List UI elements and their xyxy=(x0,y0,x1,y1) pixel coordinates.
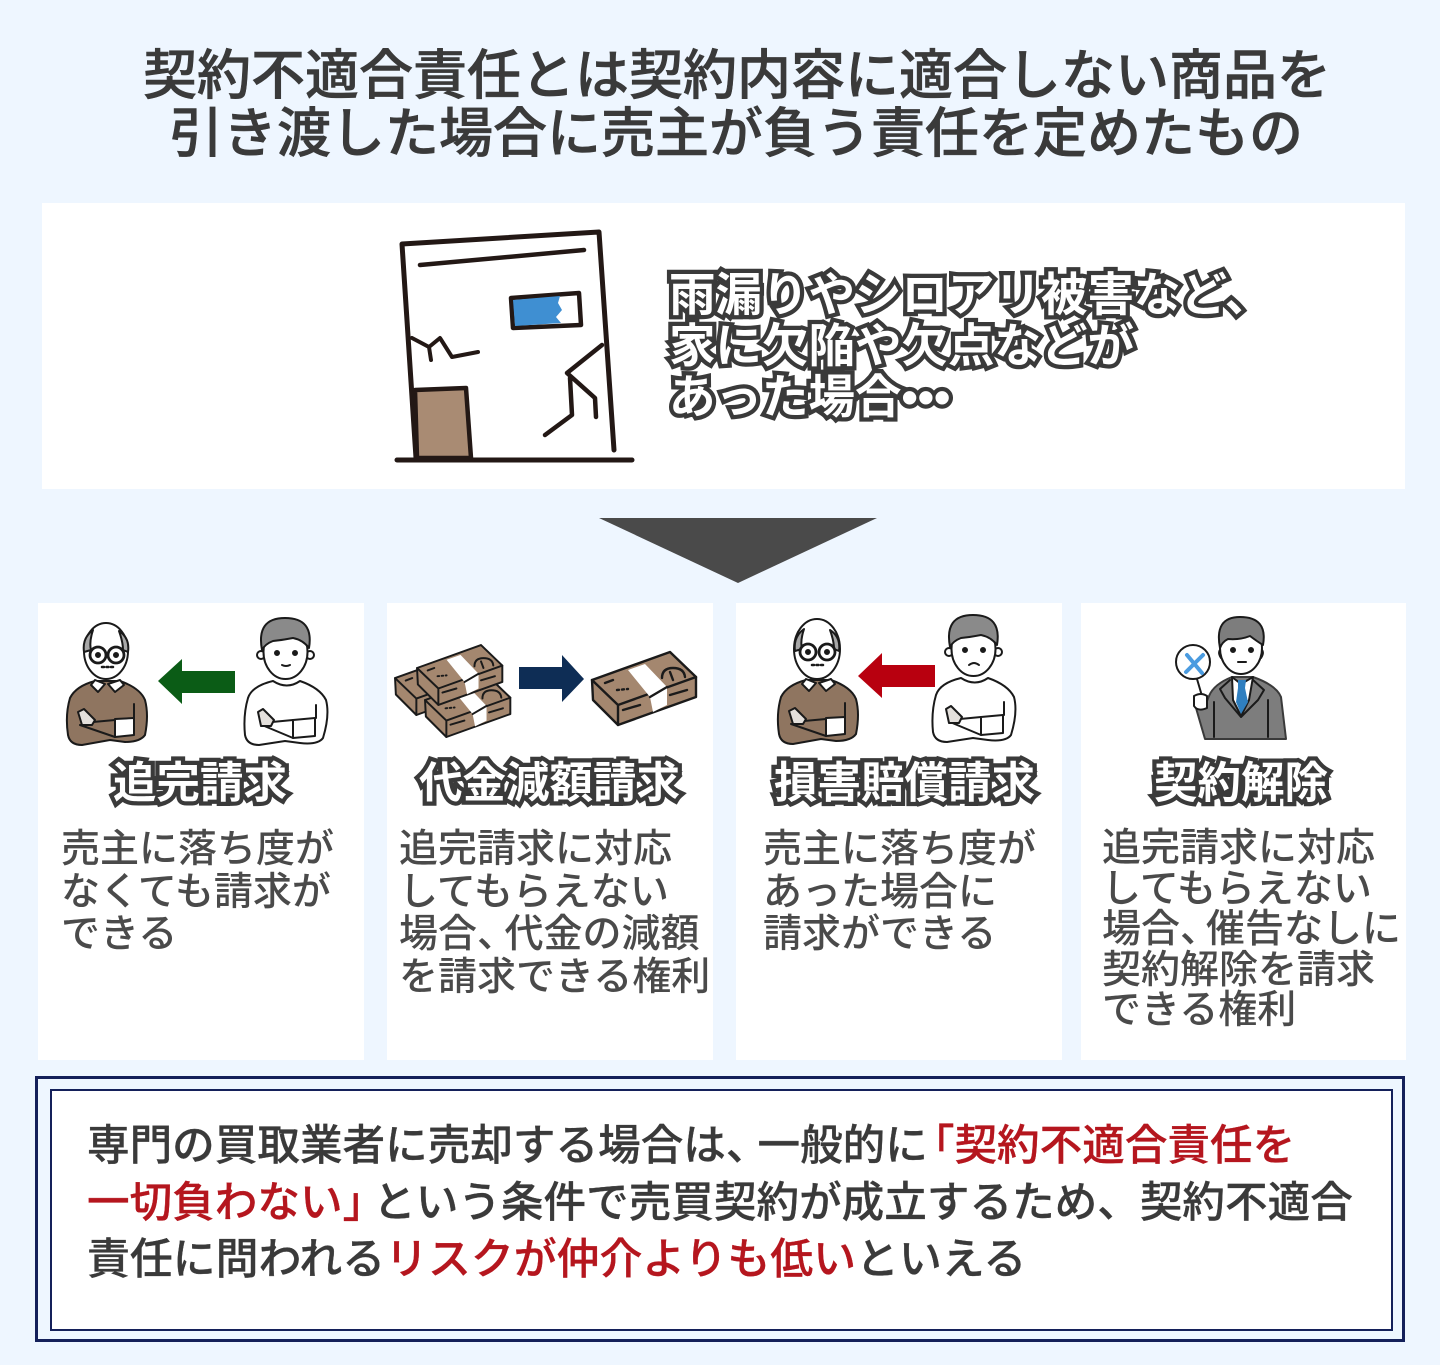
callout text: 雨漏りやシロアリ被害など、 xyxy=(669,269,1271,321)
panel: card 1 xyxy=(38,603,364,1060)
title: 契約不適合責任とは契約内容に適合しない商品を xyxy=(143,46,1331,106)
panel: card 4 xyxy=(1081,603,1406,1060)
text: description: 追完請求に対応 xyxy=(1102,827,1375,870)
text: description: 場合、代金の減額 xyxy=(399,913,700,956)
callout text xyxy=(664,266,1271,424)
text: description xyxy=(763,828,1036,956)
text: description: なくても請求が xyxy=(61,870,331,914)
panel: conclusion box xyxy=(35,1076,1405,1342)
panel: card 2 xyxy=(387,603,713,1060)
heading: 契約解除: 契約解除 xyxy=(1154,760,1328,808)
title: 引き渡した場合に売主が負う責任を定めたもの xyxy=(169,104,1303,164)
text: description: 請求ができる xyxy=(763,913,996,956)
title xyxy=(143,46,1331,164)
text: description: できる xyxy=(61,913,177,956)
text: description: 売主に落ち度が xyxy=(763,828,1036,871)
text: description xyxy=(61,828,334,956)
panel: defect case xyxy=(42,203,1405,489)
text: description xyxy=(1102,827,1401,1032)
icon: businessman holding cross paddle xyxy=(1175,616,1287,740)
text: description: 場合、催告なしに xyxy=(1102,908,1401,951)
heading: 損害賠償請求: 損害賠償請求 xyxy=(774,760,1035,808)
text: description: 売主に落ち度が xyxy=(61,828,334,871)
icon: money bundles with navy arrow xyxy=(394,644,698,738)
inner frame with note text xyxy=(50,1089,1393,1331)
text: description: できる権利 xyxy=(1102,989,1296,1032)
callout text: 家に欠陥や欠点などが xyxy=(669,320,1134,372)
heading: 代金減額請求: 代金減額請求 xyxy=(419,760,680,808)
callout text: あった場合••• xyxy=(669,371,950,423)
heading: 追完請求: 追完請求 xyxy=(113,760,287,808)
text: description: 追完請求に対応 xyxy=(399,828,672,871)
text: description: してもらえない xyxy=(1102,868,1372,910)
inner frame with note text: 一切負わない」という条件で売買契約が成立するため、契約不適合 xyxy=(87,1179,1353,1227)
arrow: down triangle xyxy=(599,518,877,583)
text: description: 契約解除を請求 xyxy=(1102,948,1375,992)
inner frame with note text: 責任に問われるリスクが仲介よりも低いといえる xyxy=(87,1236,1026,1284)
text: description: を請求できる権利 xyxy=(399,956,710,998)
text: description: あった場合に xyxy=(763,870,997,914)
panel: card 3 xyxy=(736,603,1062,1060)
icon: elder and young man with green arrow xyxy=(66,617,328,746)
icon: elder and worried man with red arrow xyxy=(776,614,1016,745)
icon: damaged house xyxy=(394,230,634,462)
inner frame with note text: 専門の買取業者に売却する場合は、一般的に「契約不適合責任を xyxy=(87,1122,1295,1170)
text: description: してもらえない xyxy=(399,870,669,914)
text: description xyxy=(399,828,710,998)
